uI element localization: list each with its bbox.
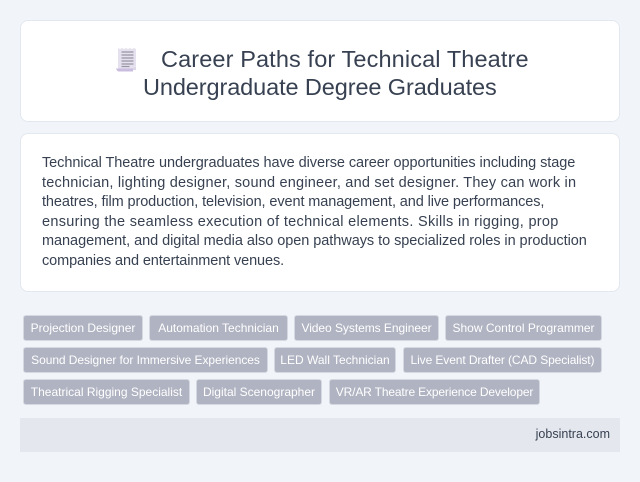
- tag: [403, 347, 602, 373]
- tag: [294, 315, 439, 341]
- tag: LED Wall Technician: [280, 353, 390, 367]
- footer source text: jobsintra.com: [536, 427, 610, 441]
- tag: Show Control Programmer: [452, 321, 595, 335]
- description text: technician, lighting designer, sound engineer, and set designer. They can work in: [42, 175, 576, 191]
- tag: [274, 347, 396, 373]
- description text: companies and entertainment venues.: [42, 253, 284, 269]
- tag: [329, 379, 540, 405]
- title line 1: Career Paths for Technical Theatre: [161, 46, 529, 72]
- description text: [42, 155, 587, 269]
- tag: [23, 347, 268, 373]
- description text: management, and digital media also open pathways to specialized roles in production: [42, 233, 587, 249]
- tag: VR/AR Theatre Experience Developer: [336, 385, 533, 399]
- tag: [23, 379, 190, 405]
- tag: Theatrical Rigging Specialist: [31, 385, 182, 399]
- description text: Technical Theatre undergraduates have diverse career opportunities including stage: [42, 155, 575, 171]
- footer bar: [20, 418, 620, 452]
- tag: [445, 315, 602, 341]
- tag: [23, 315, 143, 341]
- description text: ensuring the seamless execution of technical elements. Skills in rigging, prop: [42, 214, 559, 230]
- tag: [149, 315, 288, 341]
- panel: description: [20, 133, 620, 292]
- tag: Projection Designer: [31, 321, 135, 335]
- icon: scroll document: [116, 48, 136, 72]
- title line 2: Undergraduate Degree Graduates: [143, 74, 497, 100]
- description text: theatres, film production, television, event management, and live performances,: [42, 194, 544, 210]
- panel: title card: [20, 20, 620, 122]
- tag: Digital Scenographer: [203, 385, 315, 399]
- tag: Sound Designer for Immersive Experiences: [31, 353, 260, 367]
- tags panel: [23, 315, 602, 405]
- tag: [196, 379, 322, 405]
- tag: Live Event Drafter (CAD Specialist): [411, 353, 594, 367]
- tag: Automation Technician: [158, 321, 279, 335]
- tag: Video Systems Engineer: [301, 321, 432, 335]
